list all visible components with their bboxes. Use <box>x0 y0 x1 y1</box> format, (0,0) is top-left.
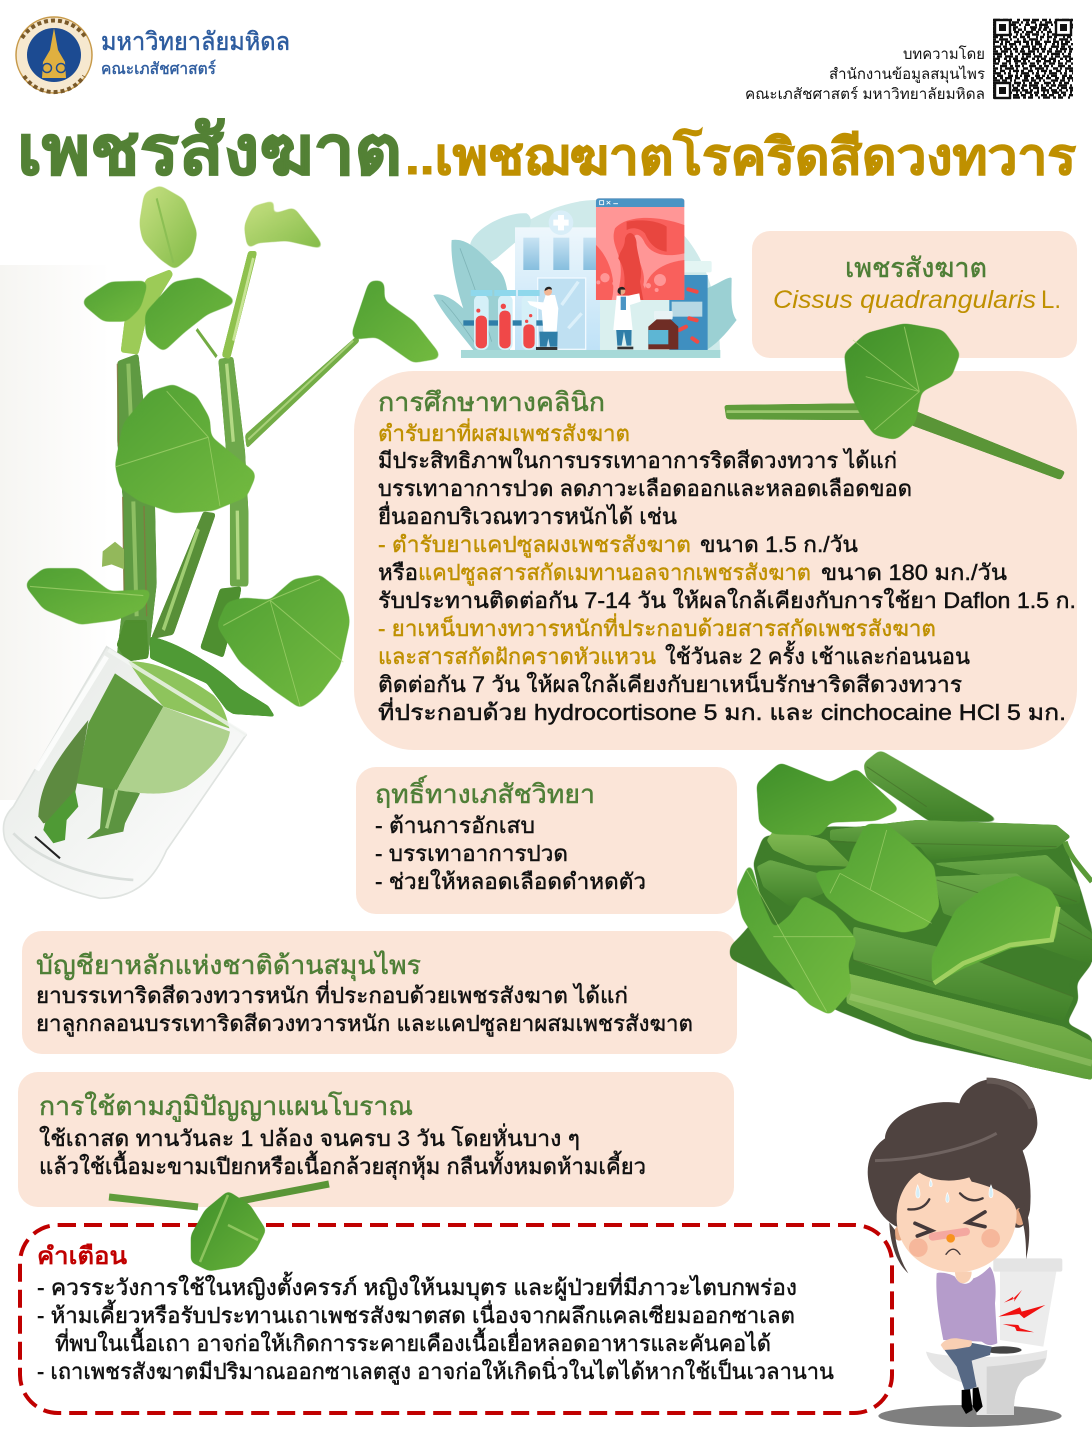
leaves inside glass <box>38 662 230 843</box>
clinical body text: มีประสิทธิภาพในการบรรเทาอาการริดสีดวงทวาร ได้แก่ <box>378 448 897 473</box>
traditional use text <box>39 1123 646 1180</box>
photo: glass with leaves <box>3 620 275 898</box>
legs and shoes <box>944 1340 992 1414</box>
warning text: - เถาเพชรสังฆาตมีปริมาณออกซาเลตสูง อาจก่อให้เกิดนิ่วในไตได้หากใช้เป็นเวลานาน <box>37 1356 834 1385</box>
pharmacology heading: ฤทธิ์ทางเภสัชวิทยา <box>375 775 595 809</box>
article credit: สำนักงานข้อมูลสมุนไพร <box>829 65 985 84</box>
faculty name: คณะเภสัชศาสตร์ <box>101 59 216 78</box>
clinical body text: ขนาด 1.5 ก./วัน <box>700 532 858 557</box>
clinical body text: ติดต่อกัน 7 วัน ให้ผลใกล้เคียงกับยาเหน็บรักษาริดสีดวงทวาร <box>378 670 962 697</box>
clinical body text: และสารสกัดฝักคราดหัวแหวน <box>378 644 656 669</box>
back leaf and stems above rim <box>117 620 148 662</box>
header: university logo <box>16 17 290 93</box>
title: tagline: ..เพชฌฆาตโรคริดสีดวงทวาร <box>405 127 1076 185</box>
illustration: woman in pain on toilet <box>868 1079 1062 1427</box>
medicine bottle <box>648 311 678 349</box>
clinical body text: บรรเทาอาการปวด ลดภาวะเลือดออกและหลอดเลือดขอด <box>378 476 912 501</box>
facial features <box>908 1193 985 1254</box>
essential list heading: บัญชียาหลักแห่งชาติด้านสมุนไพร <box>36 950 421 981</box>
clinical heading: การศึกษาทางคลินิก <box>378 387 605 417</box>
leaves <box>737 763 1060 1015</box>
photo: vine cutting <box>24 186 443 658</box>
warning text: - ห้ามเคี้ยวหรือรับประทานเถาเพชรสังฆาตสด เนื่องจากผลึกแคลเซียมออกซาเลต <box>37 1300 795 1328</box>
photo: large right leaf of vine <box>217 575 350 708</box>
clinical body text: แคปซูลสารสกัดเมทานอลจากเพชรสังฆาต <box>418 560 811 586</box>
Thai plant name: เพชรสังฆาต <box>845 253 987 283</box>
illustration: hospital and doctors <box>433 198 737 358</box>
pharmacology list: - ต้านการอักเสบ <box>375 813 535 838</box>
title: plant name: เพชรสังฆาต <box>17 113 402 189</box>
doctor woman <box>613 287 641 349</box>
warning heading: คำเตือน <box>37 1243 128 1270</box>
glass highlights <box>13 650 246 880</box>
clinical subheading: ตำรับยาที่ผสมเพชรสังฆาต <box>378 418 630 446</box>
icon: Mahidol seal <box>16 17 92 93</box>
scientific name: Cissus quadrangularis <box>773 286 1036 314</box>
purple sweater <box>936 1267 997 1345</box>
anatomy screen <box>596 198 684 300</box>
panel: species name: L. <box>1041 286 1061 314</box>
essential list text: ยาบรรเทาริดสีดวงทวารหนัก ที่ประกอบด้วยเพชรสังฆาต ได้แก่ <box>36 980 628 1008</box>
clinical body text <box>378 448 1076 725</box>
clinical body text: ขนาด 180 มก./วัน <box>821 560 1007 585</box>
hair back <box>868 1079 1037 1228</box>
photo: stem segment with leaf above warning <box>109 1184 329 1271</box>
panel: species name <box>752 231 1077 358</box>
panel: pharmacological activity <box>356 767 737 914</box>
article credit: คณะเภสัชศาสตร์ มหาวิทยาลัยมหิดล <box>745 86 985 103</box>
photo: pile of stems and leaves <box>730 750 1092 1080</box>
sweat drops <box>916 1179 993 1202</box>
stems <box>103 251 360 658</box>
clinical body text: ยื่นออกบริเวณทวารหนักได้ เช่น <box>378 501 677 529</box>
title <box>17 113 1076 189</box>
article credit <box>745 45 985 103</box>
traditional use heading: การใช้ตามภูมิปัญญาแผนโบราณ <box>39 1091 413 1122</box>
photo: stem segment with leaf on clinical panel <box>724 323 1065 480</box>
glass body <box>3 647 246 898</box>
panel: national list of essential herbal medicines <box>22 931 737 1054</box>
clinical body text: - ตำรับยาแคปซูลผงเพชรสังฆาต <box>378 532 691 558</box>
warning text <box>37 1272 834 1385</box>
doctor man <box>527 287 558 350</box>
hair strands <box>889 1223 908 1273</box>
article credit: บทความโดย <box>903 45 985 63</box>
essential list text <box>36 980 693 1037</box>
clinical body text: - ยาเหน็บทางทวารหนักที่ประกอบด้วยสารสกัดเพชรสังฆาต <box>378 613 936 641</box>
stems <box>730 750 1092 1080</box>
toilet <box>926 1258 1062 1415</box>
pharmacology list <box>375 813 646 894</box>
icon: QR code <box>993 20 1073 98</box>
clinical body text: ใช้วันละ 2 ครั้ง เช้าและก่อนนอน <box>665 641 970 669</box>
pharmacology list: - บรรเทาอาการปวด <box>375 841 568 866</box>
floor shadow <box>878 1405 1062 1427</box>
university name: มหาวิทยาลัยมหิดล <box>101 28 290 56</box>
traditional use text: แล้วใช้เนื้อมะขามเปียกหรือเนื้อกล้วยสุกหุ้ม กลืนทั้งหมดห้ามเคี้ยว <box>39 1151 646 1180</box>
panel: warning <box>20 1225 892 1413</box>
warning text: - ควรระวังการใช้ในหญิงตั้งครรภ์ หญิงให้นมบุตร และผู้ป่วยที่มีภาวะไตบกพร่อง <box>37 1272 797 1301</box>
pharmacology list: - ช่วยให้หลอดเลือดดำหดตัว <box>375 869 646 894</box>
traditional use text: ใช้เถาสด ทานวันละ 1 ปล้อง จนครบ 3 วัน โดยหั่นบาง ๆ <box>39 1123 580 1151</box>
warning text: ที่พบในเนื้อเถา อาจก่อให้เกิดการระคายเคืองเนื้อเยื่อหลอดอาหารและคันคอได้ <box>55 1328 771 1356</box>
icon: pain lightning bolts <box>998 1290 1045 1332</box>
clinical body text: รับประทานติดต่อกัน 7-14 วัน ให้ผลใกล้เคียงกับการใช้ยา Daflon 1.5 ก. <box>378 588 1076 613</box>
clinical body text: ที่ประกอบด้วย hydrocortisone 5 มก. และ cinchocaine HCl 5 มก. <box>378 697 1066 725</box>
ears <box>894 1226 905 1241</box>
essential list text: ยาลูกกลอนบรรเทาริดสีดวงทวารหนัก และแคปซูลยาผสมเพชรสังฆาต <box>36 1011 693 1037</box>
soft photo shadow behind vine <box>0 265 110 800</box>
hands <box>941 1338 972 1350</box>
face <box>897 1173 1017 1272</box>
leaves <box>24 186 443 625</box>
panel: clinical studies <box>354 371 1077 750</box>
panel: traditional use <box>18 1072 734 1207</box>
neck <box>955 1272 972 1283</box>
clinical body text: หรือ <box>378 560 418 585</box>
